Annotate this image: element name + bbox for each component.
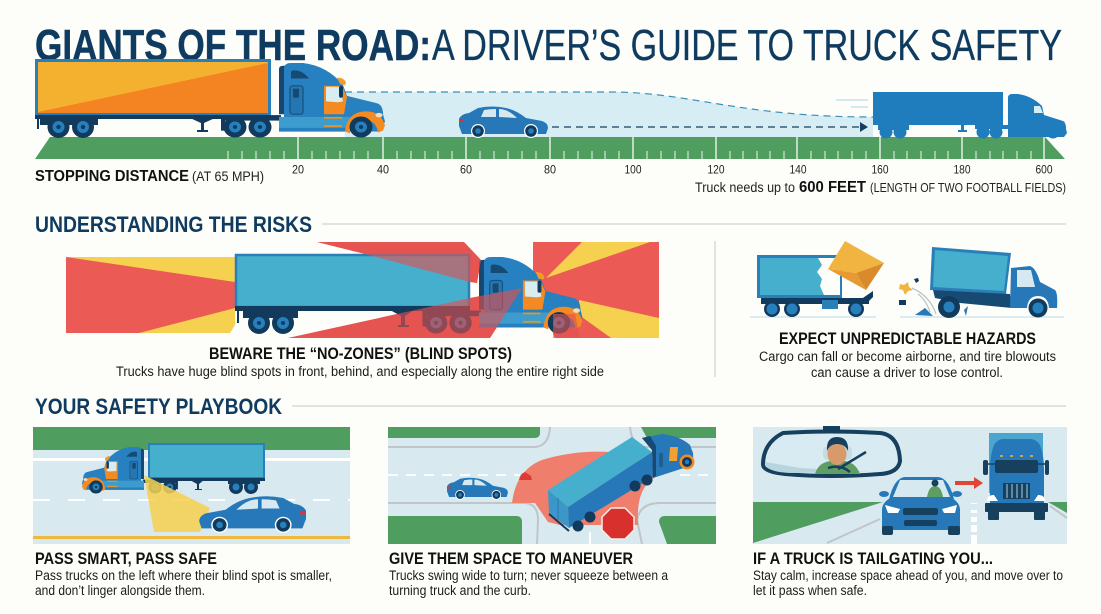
passing car <box>199 496 306 533</box>
maneuver description: Trucks swing wide to turn; never squeeze between a <box>389 568 668 583</box>
stopped truck silhouette <box>836 92 1067 138</box>
red brake marker <box>519 472 532 480</box>
stop sign <box>602 508 634 539</box>
stopping distance label: STOPPING DISTANCE <box>35 168 189 185</box>
stopping distance arrow <box>552 122 868 132</box>
tailgating description: let it pass when safe. <box>753 583 867 598</box>
hazards description: Cargo can fall or become airborne, and tire blowouts <box>759 349 1056 364</box>
section heading: understanding the risks: UNDERSTANDING THE RISKS <box>35 212 312 237</box>
rear-view mirror with driver <box>763 426 900 476</box>
car ahead of truck <box>879 477 962 535</box>
no-zones truck <box>235 255 582 334</box>
stopping distance road ruler: 60 <box>460 162 472 176</box>
hazards description: can cause a driver to lose control. <box>811 365 1003 380</box>
pass description <box>35 568 332 598</box>
hero truck <box>35 60 385 138</box>
title: GIANTS OF THE ROAD: <box>35 21 431 70</box>
turning truck <box>548 434 694 532</box>
maneuver heading: GIVE THEM SPACE TO MANEUVER <box>389 549 633 568</box>
road scene <box>33 427 350 544</box>
move-over arrow <box>955 477 983 489</box>
icon: truck losing cargo <box>750 241 1064 317</box>
panel: give them space <box>388 427 716 598</box>
stopping distance road ruler: 180 <box>954 162 971 176</box>
truck needs 600 feet callout: Truck needs up to <box>695 180 795 195</box>
panel: pass smart <box>33 427 350 598</box>
stopping distance road ruler: 120 <box>708 162 725 176</box>
section heading: your safety playbook: YOUR SAFETY PLAYBOOK <box>35 394 282 419</box>
icon: tire blowout truck <box>899 247 1057 318</box>
stopping distance shaded zone <box>345 92 873 137</box>
panel: no-zones blind spots <box>66 242 659 379</box>
truck needs 600 feet callout <box>695 179 1066 196</box>
tailgating description <box>753 568 1063 598</box>
title <box>35 21 1062 70</box>
stopping distance road ruler: 160 <box>872 162 889 176</box>
intersection scene <box>388 427 716 544</box>
side and front blind spots <box>288 242 659 338</box>
stopping distance road ruler: 140 <box>790 162 807 176</box>
pass description: and don’t linger alongside them. <box>35 583 205 598</box>
panel: unpredictable hazards <box>750 241 1064 380</box>
truck needs 600 feet callout: (LENGTH OF TWO FOOTBALL FIELDS) <box>870 180 1066 195</box>
no-zones heading: BEWARE THE “NO-ZONES” (BLIND SPOTS) <box>209 344 512 363</box>
stopping distance road ruler: 600 <box>1036 162 1053 176</box>
truck swing area <box>512 452 660 525</box>
panel: tailgating <box>753 426 1067 598</box>
rear blind spot <box>66 257 235 333</box>
stopping distance road ruler <box>35 137 1065 176</box>
tailgating truck front <box>983 433 1049 520</box>
stopping distance label: (AT 65 MPH) <box>192 168 264 184</box>
no-zones description: Trucks have huge blind spots in front, behind, and especially along the entire right side <box>116 364 604 379</box>
small blind spot cone <box>144 475 210 532</box>
tailgating description: Stay calm, increase space ahead of you, and move over to <box>753 568 1063 583</box>
passing truck <box>82 444 265 494</box>
truck needs 600 feet callout: 600 FEET <box>799 179 866 196</box>
hazards description <box>759 349 1056 380</box>
road scene <box>753 427 1067 544</box>
stopping distance road ruler: 20 <box>292 162 304 176</box>
pass heading: PASS SMART, PASS SAFE <box>35 549 217 568</box>
hazards heading: EXPECT UNPREDICTABLE HAZARDS <box>779 329 1036 348</box>
pass description: Pass trucks on the left where their blind spot is smaller, <box>35 568 332 583</box>
car in stopping zone <box>459 106 548 138</box>
translucent blind spot overlay <box>288 242 580 338</box>
car at intersection <box>447 478 508 500</box>
stopping distance road ruler: 40 <box>377 162 389 176</box>
stopping distance road ruler: 100 <box>624 162 642 176</box>
stopping distance road ruler: 80 <box>544 162 556 176</box>
maneuver description: turning truck and the curb. <box>389 583 531 598</box>
tailgating heading: IF A TRUCK IS TAILGATING YOU... <box>753 549 993 568</box>
maneuver description <box>389 568 668 598</box>
